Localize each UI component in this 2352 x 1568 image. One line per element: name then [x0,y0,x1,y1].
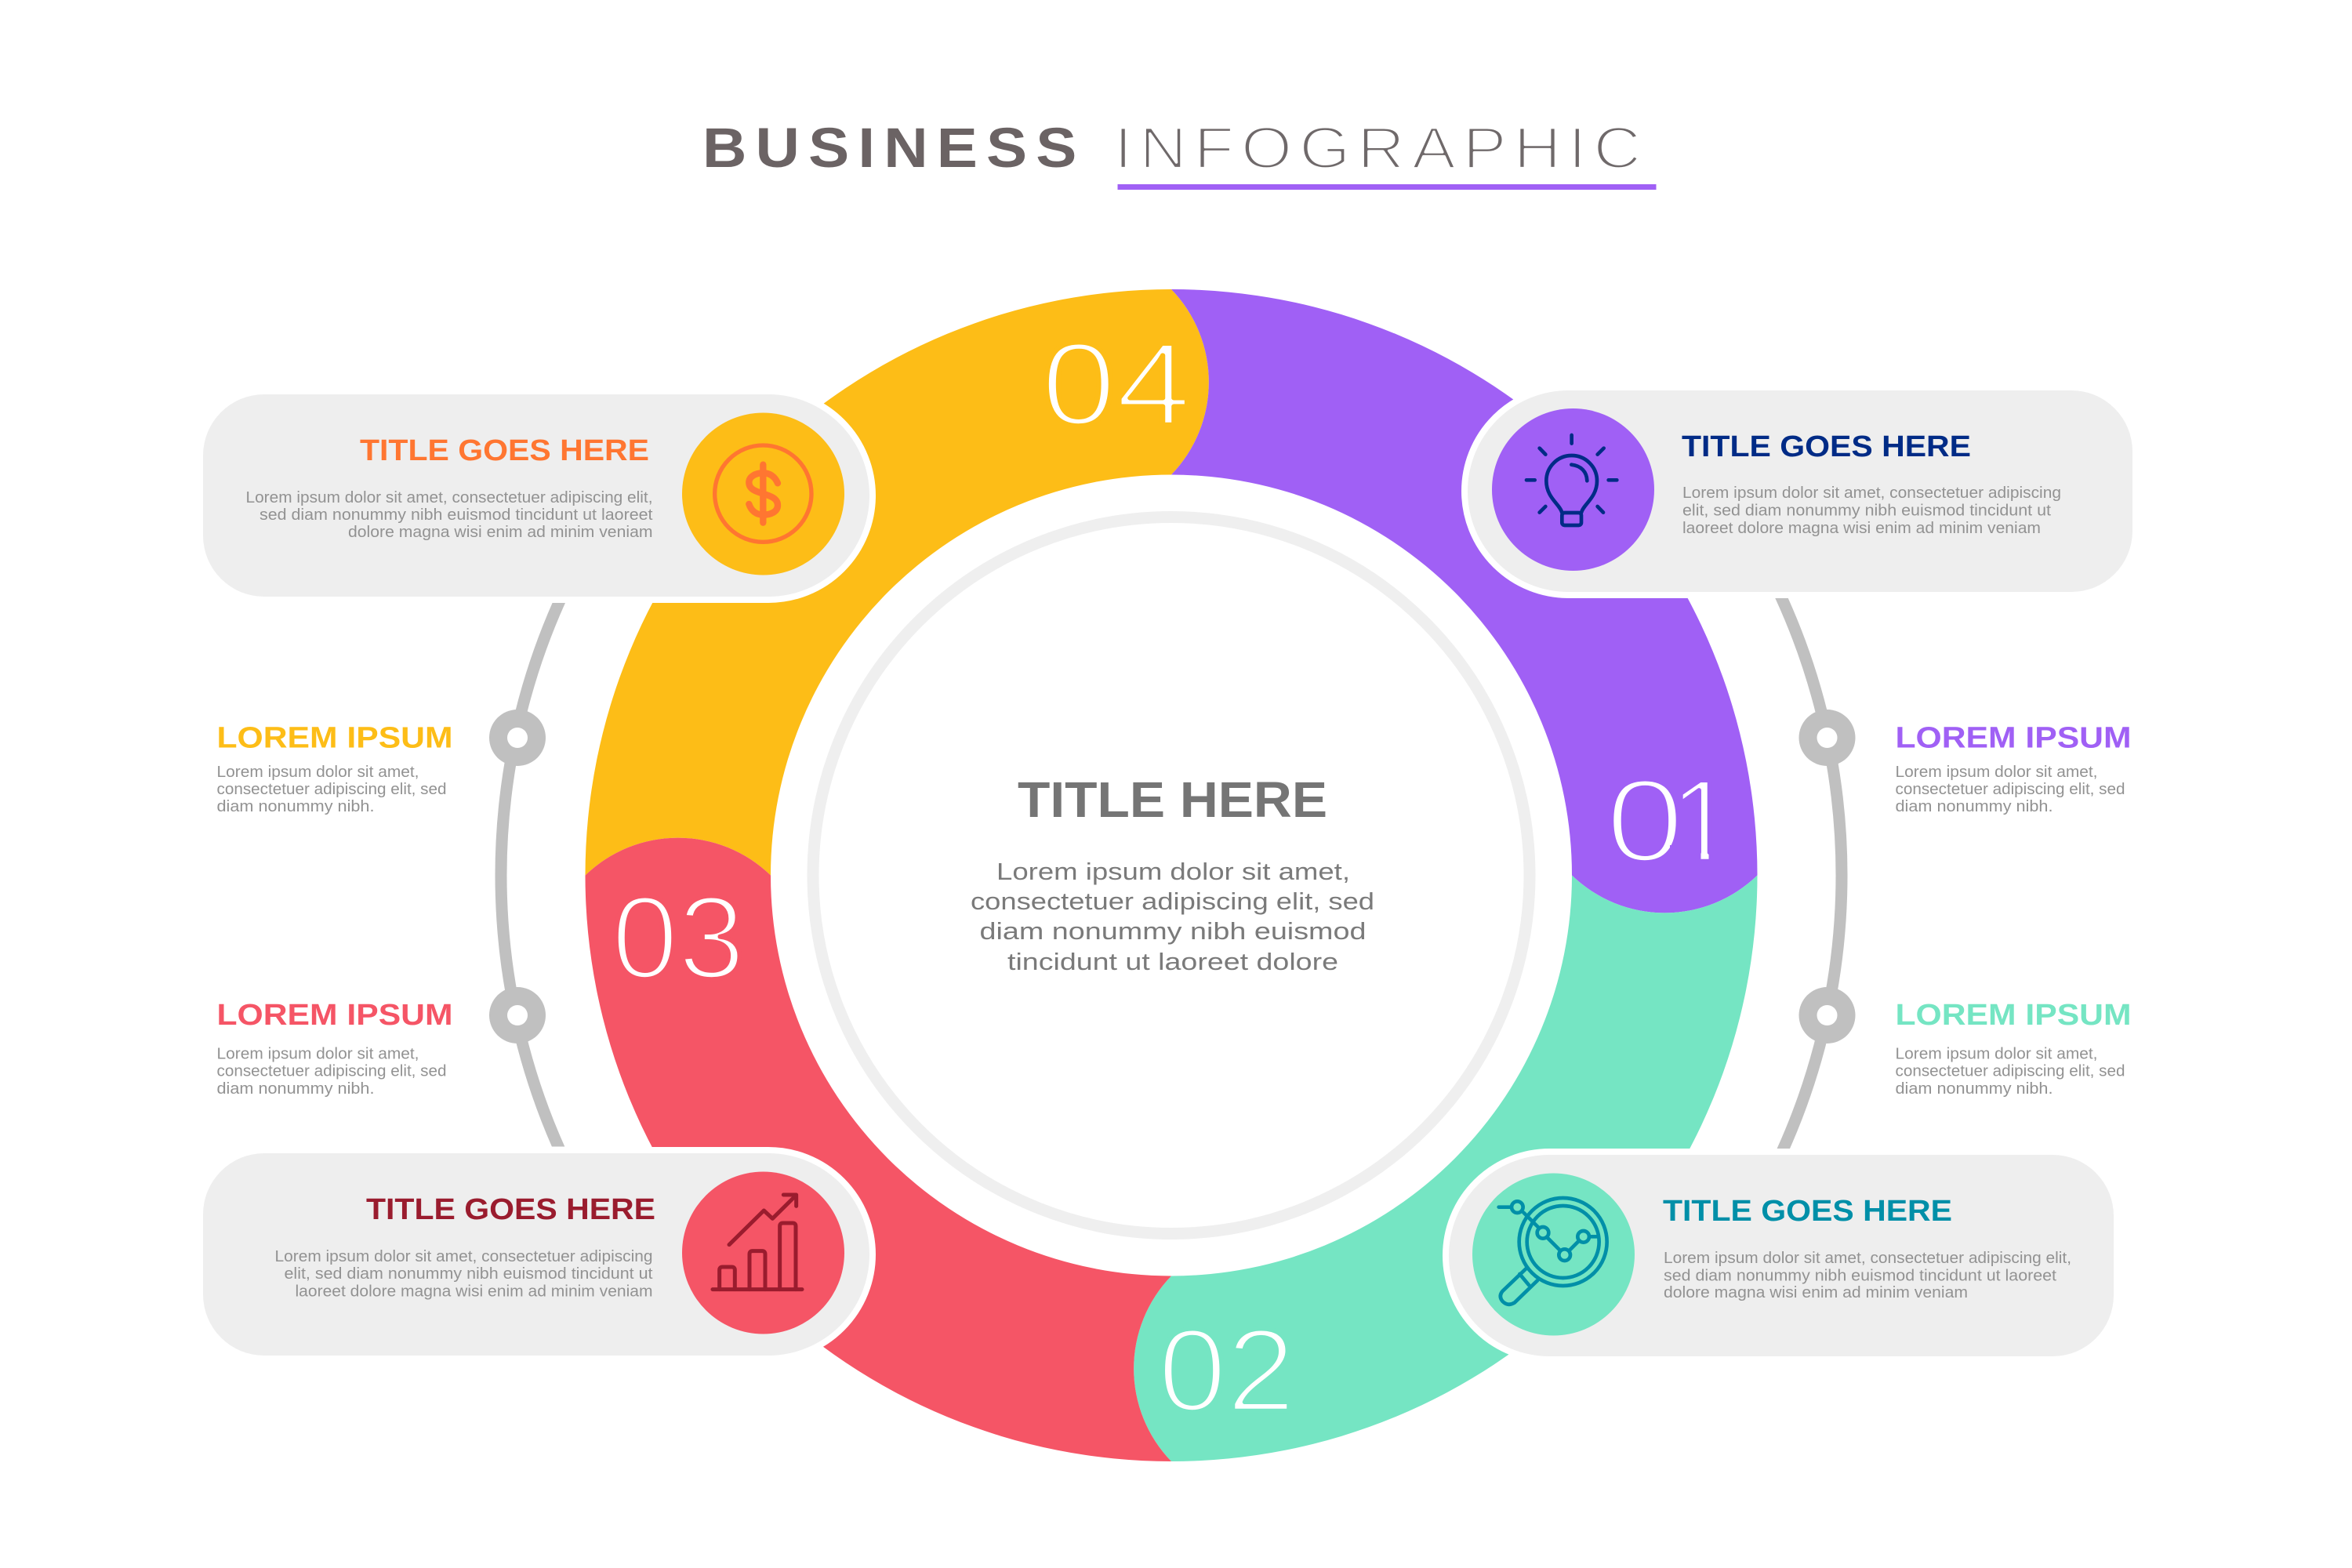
text block: right upper label: diam nonummy nibh. [1896,798,2053,815]
text block: left lower label: consectetuer adipiscing elit, sed [216,1063,447,1080]
icon: growth chart [713,1195,802,1290]
panel: bottom left card: TITLE GOES HERE [366,1193,655,1226]
panel: bottom right card: sed diam nonummy nibh euismod tincidunt ut laoreet [1664,1267,2056,1284]
center text block [971,771,1374,975]
ring segment 04 yellow [585,289,1209,875]
text block: right lower label: consectetuer adipiscing elit, sed [1896,1063,2125,1080]
outer grey connector arcs [501,549,1842,1202]
panel: top left card: sed diam nonummy nibh euismod tincidunt ut laoreet [260,506,653,524]
panel: top right card: laoreet dolore magna wisi enim ad minim veniam [1682,520,2041,537]
center text block: consectetuer adipiscing elit, sed [971,887,1374,915]
panel: top left card: Lorem ipsum dolor sit amet, consectetuer adipiscing elit, [246,489,652,506]
icon: magnifier with chart [1499,1198,1607,1305]
text block: right upper label: consectetuer adipiscing elit, sed [1896,781,2125,798]
text block: right upper label: Lorem ipsum dolor sit amet, [1896,764,2098,781]
icon: dollar coin [715,445,811,542]
number 01 [1606,754,1739,886]
number 01: 1 [1670,754,1735,886]
text block: right upper label: LOREM IPSUM [1896,721,2131,754]
number 01: 0 [1606,754,1684,886]
panel: top left card [203,394,869,597]
text block: left lower label [216,999,453,1098]
title: INFOGRAPHIC [1114,115,1641,181]
number 02: 02 [1158,1305,1295,1436]
text block: left lower label: Lorem ipsum dolor sit amet, [216,1046,419,1063]
number 04: 04 [1041,318,1191,450]
center text block: TITLE HERE [1018,771,1327,828]
text block: left lower label: LOREM IPSUM [216,999,453,1032]
node markers [489,710,1855,1044]
text block: left upper label: consectetuer adipiscing elit, sed [216,781,447,798]
inner thin ring [813,517,1530,1234]
text block: right upper label [1896,721,2131,815]
center text block: tincidunt ut laoreet dolore [1007,948,1338,975]
center text block: Lorem ipsum dolor sit amet, [996,858,1350,885]
panel: bottom right card: dolore magna wisi enim ad minim veniam [1664,1284,1968,1301]
title [702,115,1656,190]
text block: left upper label [216,721,453,815]
panel: top right card: elit, sed diam nonummy nibh euismod tincidunt ut [1682,502,2051,519]
ring segment 03 red [585,838,1171,1461]
text block: left upper label: Lorem ipsum dolor sit amet, [216,764,419,781]
panel: top right card [1468,390,2132,592]
panel: bottom left card: laoreet dolore magna wisi enim ad minim veniam [295,1283,652,1300]
panel: bottom left card: Lorem ipsum dolor sit amet, consectetuer adipiscing [274,1248,652,1265]
title: BUSINESS [702,116,1076,179]
icon: light bulb [1526,435,1617,525]
panel: bottom left card: elit, sed diam nonummy nibh euismod tincidunt ut [284,1265,653,1283]
text block: right lower label: Lorem ipsum dolor sit amet, [1896,1046,2098,1063]
ring segment 02 teal [1134,875,1758,1461]
panel: top left card: dolore magna wisi enim ad minim veniam [348,524,652,541]
text block: left upper label: diam nonummy nibh. [216,798,375,815]
panel: bottom right card: TITLE GOES HERE [1663,1195,1952,1228]
panel: top right card: TITLE GOES HERE [1682,430,1971,463]
ring segment 01 purple [1171,289,1758,913]
text block: left upper label: LOREM IPSUM [216,721,453,754]
text block: right lower label [1896,999,2131,1098]
text block: right lower label: diam nonummy nibh. [1896,1080,2053,1098]
panel: bottom right card [1449,1155,2114,1356]
panel: bottom right card: Lorem ipsum dolor sit amet, consectetuer adipiscing elit, [1664,1250,2071,1267]
center text block: diam nonummy nibh euismod [980,917,1366,945]
text block: right lower label: LOREM IPSUM [1896,999,2131,1032]
panel: top right card: Lorem ipsum dolor sit amet, consectetuer adipiscing [1682,485,2061,502]
text block: left lower label: diam nonummy nibh. [216,1080,375,1098]
number 03: 03 [612,872,745,1004]
panel: bottom left card [203,1153,869,1356]
panel: top left card: TITLE GOES HERE [360,434,649,467]
